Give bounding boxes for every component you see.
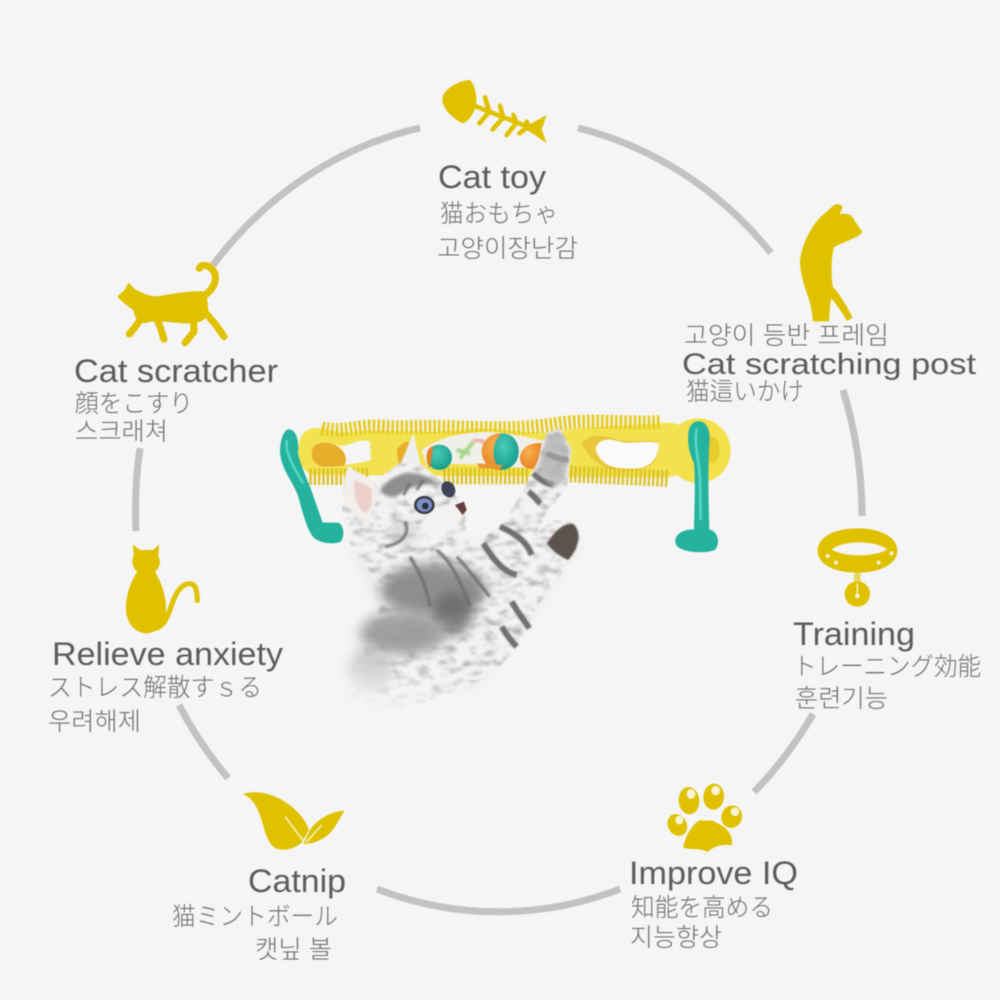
item: cat scratcher [74, 265, 278, 446]
heading: Cat scratcher: Cat scratcher [74, 353, 278, 389]
kitten: paw pads [547, 524, 579, 560]
Japanese label: ストレス解散すｓる [48, 674, 262, 702]
icon: walking cat [117, 265, 224, 343]
icon: leaves [243, 792, 344, 850]
heading: Training: Training [793, 616, 915, 652]
Korean label: 훈련기능 [795, 685, 888, 713]
toy: coloured balls and feathers [427, 433, 542, 470]
Korean label: 고양이장난감 [437, 235, 578, 263]
toy: teal right handle [675, 421, 718, 552]
heading: Improve IQ: Improve IQ [629, 855, 798, 891]
Korean label: 우려해제 [48, 708, 141, 736]
kitten: soft shadow [364, 566, 372, 580]
icon: paw print [664, 783, 745, 852]
kitten: tabby stripes [483, 453, 568, 647]
Korean label: 스크래쳐 [75, 418, 168, 446]
item: cat toy [437, 80, 578, 263]
Japanese label: 猫ミントボール [172, 903, 338, 931]
kitten: right ear [402, 433, 420, 463]
kitten: body silhouette with fur texture [337, 428, 582, 710]
item: catnip [172, 792, 346, 964]
icon: standing cat [801, 205, 862, 321]
kitten: eyes [414, 479, 458, 514]
dashed ring of grey arcs [135, 128, 862, 912]
kitten: nose [455, 502, 467, 515]
heading: Cat scratching post: Cat scratching post [682, 348, 977, 381]
icon: sitting cat [126, 544, 197, 633]
item: improve IQ [629, 783, 798, 952]
Korean label: 고양이 등반 프레임 [684, 322, 889, 350]
item: relieve anxiety [48, 544, 283, 736]
Korean label: 캣닢 볼 [255, 936, 332, 964]
item: cat scratching post [682, 205, 977, 406]
kitten: grey back shading [348, 473, 487, 693]
toy: yellow track with bristles [298, 422, 691, 479]
toy: teal left handle [280, 429, 343, 543]
kitten [337, 428, 582, 710]
toy: track openings [312, 440, 371, 467]
central photo: kitten playing with toy [280, 418, 731, 710]
kitten: muzzle [416, 500, 468, 542]
icon: fish bone [442, 80, 547, 143]
Japanese label: 知能を高める [631, 894, 773, 922]
toy: suction cup [666, 418, 731, 483]
Japanese label: 猫這いかけ [686, 378, 804, 406]
Japanese label: 猫おもちゃ [440, 200, 558, 228]
kitten: ear [344, 467, 377, 522]
heading: Cat toy: Cat toy [438, 159, 546, 195]
item: training [793, 528, 981, 713]
heading: Relieve anxiety: Relieve anxiety [52, 636, 283, 672]
icon: collar with bell [818, 528, 897, 607]
kitten: raised paw [537, 430, 570, 488]
Japanese label: トレーニング効能 [793, 653, 981, 681]
heading: Catnip: Catnip [248, 863, 346, 899]
Korean label: 지능향상 [630, 924, 722, 952]
Japanese label: 顔をこすり [75, 390, 193, 418]
